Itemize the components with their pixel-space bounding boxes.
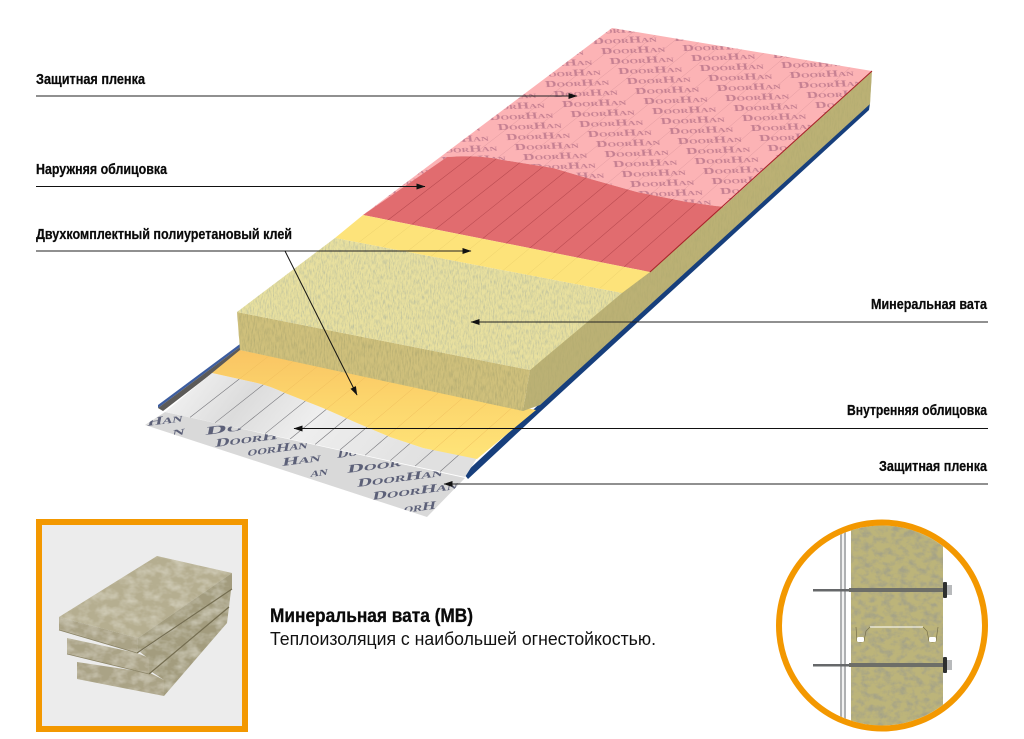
wool core cross-section	[851, 520, 943, 730]
watermark text: n	[171, 423, 187, 439]
watermark text: Han	[146, 411, 185, 429]
watermark text: Han	[281, 450, 323, 469]
watermark text: oorHan	[246, 437, 310, 459]
icon: stack of slabs	[59, 556, 232, 696]
watermark text: Do	[336, 445, 359, 461]
label: mineral wool: Минеральная вата	[871, 297, 988, 313]
watermark text: orH	[402, 498, 438, 516]
inner facing aluminium sheet	[166, 373, 476, 477]
inner protective film	[145, 411, 465, 517]
watermark text: DoorH	[214, 428, 280, 450]
label: protective film bottom: Защитная пленка	[879, 459, 988, 475]
label: inner facing: Внутренняя облицовка	[847, 403, 988, 419]
watermark text: DoorHan	[356, 465, 445, 490]
watermark text: Door	[204, 415, 278, 438]
label: two-component polyurethane glue: Двухкомплектный полиуретановый клей	[36, 227, 292, 243]
outer facing red	[363, 70, 872, 272]
inner glue layer	[212, 350, 536, 459]
watermark text: Door	[346, 455, 404, 476]
label: two-component polyurethane glue	[36, 227, 471, 395]
upper screw	[813, 582, 952, 598]
lower screw	[813, 657, 952, 673]
adhesive yellow layer	[335, 215, 650, 293]
watermark text	[146, 411, 460, 516]
blue left lock edge	[158, 344, 240, 408]
gray metal lock strip	[158, 347, 241, 411]
watermark text: DoorHan	[371, 478, 460, 503]
watermark text: an	[309, 464, 330, 480]
mineral wool front face	[237, 312, 530, 411]
steel post	[840, 532, 846, 719]
panel: fastening detail circle	[779, 520, 985, 730]
panel: sandwich panel cutaway	[145, 28, 872, 517]
mineral wool top	[237, 238, 622, 370]
mineral wool side face	[523, 71, 872, 411]
text block: description: Теплоизоляция с наибольшей огнестойкостью.	[270, 629, 656, 649]
label: protective film top: Защитная пленка	[36, 72, 146, 88]
orange ring	[779, 522, 985, 728]
protective film pink	[364, 28, 872, 214]
label: outer facing: Наружняя облицовка	[36, 162, 168, 178]
panel: mineral wool slabs photo	[39, 522, 245, 729]
heading: mineral wool: Минеральная вата (МВ)	[270, 606, 473, 627]
blue bottom steel edge	[464, 103, 870, 479]
